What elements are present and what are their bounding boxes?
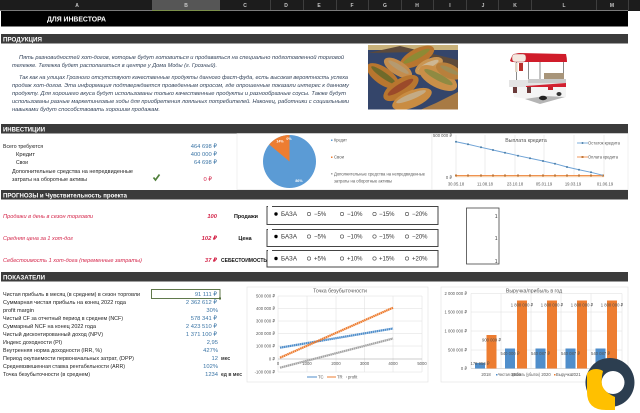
forecast inputs <box>3 214 267 264</box>
section heading: forecasts and sensitivity <box>1 190 628 200</box>
line chart: loan repayment: 11.08.18 <box>477 182 494 186</box>
selector: sales scenario: −20% <box>412 212 428 218</box>
indicators table: Средневзвешенная ставка рентабельности (ARR) <box>3 364 125 370</box>
product description text: продукту. Для хорошего вкуса будут использованы только качественные продукты и разнообразные соусы. Также будут <box>12 91 346 97</box>
investment table: 464 698 ₽ <box>191 144 217 150</box>
forecast inputs: 37 ₽ <box>205 258 218 264</box>
selector: sales scenario: −15% <box>379 212 395 218</box>
investment table: затраты на оборотные активы <box>12 177 87 183</box>
spreadsheet column header: G <box>383 3 387 9</box>
line chart: break-even point: 2000 <box>331 361 341 366</box>
line chart: loan repayment <box>432 133 628 190</box>
pie chart: funding sources: Кредит <box>334 138 347 142</box>
forecast inputs: Продажи <box>234 214 258 220</box>
forecast inputs: Продажи в день в сезон торговли <box>3 214 94 220</box>
indicators table: Индекс доходности (PI) <box>3 340 62 346</box>
bar chart: revenue and profit per year: 2 000 000 ₽ <box>445 291 467 296</box>
spreadsheet column header: M <box>610 3 614 9</box>
indicators table: Суммарная чистая прибыль на конец 2022 года <box>3 300 127 306</box>
bar chart: revenue and profit per year: 540 087 ₽ <box>531 351 550 356</box>
bar chart: revenue and profit per year: 1 000 000 ₽ <box>445 328 467 334</box>
pie chart: funding sources: 0% <box>286 137 292 141</box>
selector: sales scenario: −5% <box>314 212 327 218</box>
product description text: использованы разные маркетинговые ходы для приобретения лояльных потребителей. Наконец, работники с социальными <box>12 98 350 105</box>
selector: cost scenario: БАЗА <box>281 257 297 263</box>
section heading: products <box>1 34 628 44</box>
indicators table <box>3 290 242 378</box>
line chart: break-even point: 100 000 ₽ <box>256 344 275 348</box>
spreadsheet column header: E <box>317 3 321 9</box>
bar chart: revenue and profit per year: 2022 <box>601 372 611 377</box>
bar chart: revenue and profit per year: 1 800 000 ₽ <box>511 302 534 308</box>
line chart: loan repayment: 23.10.18 <box>507 182 524 186</box>
selector: price scenario <box>267 230 438 246</box>
indicators table: 2,95 <box>207 340 218 346</box>
indicators table: Чистый дисконтированный доход (NPV) <box>3 331 103 338</box>
indicators table: мес <box>221 356 230 362</box>
line chart: loan repayment: 500 000 ₽ <box>433 133 452 138</box>
investment table: 0 ₽ <box>203 177 212 183</box>
indicators table: Суммарный NCF на конец 2022 года <box>3 323 97 330</box>
investment table: 400 000 ₽ <box>191 152 217 158</box>
indicators table: 91 111 ₽ <box>195 292 217 298</box>
product description text <box>12 54 350 113</box>
section heading: products: ПРОДУКЦИЯ <box>3 36 42 43</box>
line chart: break-even point: 500 000 ₽ <box>256 294 275 298</box>
bar chart: revenue and profit per year: 2018 <box>481 372 491 377</box>
forecast inputs: СЕБЕСТОИМОСТЬ <box>221 258 267 264</box>
forecast inputs: Цена <box>238 236 253 242</box>
investment table: 64 698 ₽ <box>194 160 217 166</box>
bar chart: revenue and profit per year: Выручка <box>556 372 573 377</box>
product description text: продаж хот-догов. Эта информация подтверждается проведенным опросом, где опрошенные показали интерес к данному <box>12 83 350 89</box>
selector: price scenario: БАЗА <box>281 235 297 241</box>
selector: price scenario: −10% <box>347 235 363 241</box>
bar chart: revenue and profit per year <box>441 287 628 382</box>
spreadsheet column header: J <box>482 3 485 9</box>
indicators table: profit margin <box>3 308 34 314</box>
selector: price scenario: −20% <box>412 235 428 241</box>
selector: price scenario: −5% <box>314 235 327 241</box>
line chart: break-even point: -100 000 ₽ <box>255 370 275 374</box>
investment table: Дополнительные средства на непредвиденные <box>12 169 133 175</box>
bar chart: revenue and profit per year: Чистая прибыль (убыток) <box>498 372 541 377</box>
bar chart: revenue and profit per year: 540 087 ₽ <box>591 351 610 356</box>
icon: green check mark <box>154 174 160 180</box>
product description text: Пять разновидностей хот-догов, которые будут готовиться и продаваться на специально подготовленной торговой <box>19 54 345 61</box>
investment table: Свои <box>16 160 28 166</box>
indicators table: Внутренняя норма доходности (IRR, %) <box>3 348 102 354</box>
line chart: loan repayment: 01.06.19 <box>597 182 614 186</box>
spreadsheet column header <box>0 0 640 11</box>
indicators table: 12 <box>212 356 218 362</box>
pie chart: funding sources: Свои <box>334 154 345 160</box>
line chart: break-even point: 200 000 ₽ <box>256 331 275 336</box>
bar chart: revenue and profit per year: 540 000 ₽ <box>501 351 520 356</box>
line chart: loan repayment: 19.03.19 <box>565 182 582 186</box>
bar chart: revenue and profit per year: 540 087 ₽ <box>561 351 580 356</box>
indicators table: 1234 <box>205 372 219 378</box>
selector: cost scenario: +15% <box>379 257 395 263</box>
indicators table: 102% <box>203 364 218 370</box>
selector: cost scenario: +5% <box>314 257 327 263</box>
pie chart: funding sources: Дополнительные средства на непредвиденные <box>334 172 426 176</box>
investment table: Кредит <box>16 152 35 158</box>
line chart: loan repayment: 0 ₽ <box>446 175 452 180</box>
line chart: loan repayment: Выплата кредита <box>505 138 547 144</box>
pie chart: funding sources <box>237 134 432 190</box>
indicators table: 578 341 ₽ <box>191 316 217 322</box>
bar chart: revenue and profit per year: 900 000 ₽ <box>482 338 501 342</box>
indicators table: Точка безубыточности (в среднем) <box>3 372 90 378</box>
indicators table: Чистая прибыль в месяц (в среднем) в сезон торговли <box>3 292 140 298</box>
selector: cost scenario: +10% <box>347 257 363 263</box>
spreadsheet column header: K <box>513 3 517 9</box>
selector: sales scenario: БАЗА <box>281 212 297 218</box>
title banner <box>1 11 628 26</box>
bar chart: revenue and profit per year: 500 000 ₽ <box>448 348 467 352</box>
section heading: investments: ИНВЕСТИЦИИ <box>3 126 45 133</box>
selected values box <box>466 208 499 265</box>
spreadsheet column header: F <box>350 3 354 9</box>
picture: hot dogs <box>368 45 458 110</box>
line chart: break-even point: 1000 <box>302 361 312 366</box>
line chart: break-even point: 4000 <box>388 361 398 366</box>
product description text: тележке. Тележка будет располагаться в центре у Дома Моды (г. Грозный). <box>12 62 217 69</box>
bar chart: revenue and profit per year: 2021 <box>571 372 581 377</box>
line chart: break-even point: TR <box>337 374 343 380</box>
bar chart: revenue and profit per year: 178 956 ₽ <box>471 361 490 366</box>
bar chart: revenue and profit per year: 2019 <box>511 372 521 377</box>
selector: price scenario: −15% <box>379 235 395 241</box>
selected values box: 1 <box>495 214 498 220</box>
section heading: indicators: ПОКАЗАТЕЛИ <box>3 274 45 281</box>
line chart: loan repayment: 30.05.18 <box>448 182 465 186</box>
section heading: investments <box>1 124 628 134</box>
line chart: break-even point: TC <box>318 374 324 380</box>
bar chart: revenue and profit per year: 1 800 000 ₽ <box>601 302 624 308</box>
line chart: break-even point: Точка безубыточности <box>313 288 367 294</box>
line chart: loan repayment: 05.01.19 <box>536 182 553 186</box>
bar chart: revenue and profit per year: 1 500 000 ₽ <box>445 310 467 314</box>
icon: logo watermark <box>585 358 634 410</box>
spreadsheet column header: I <box>449 3 451 9</box>
line chart: break-even point: 5000 <box>417 361 427 366</box>
forecast inputs: Себестоимость 1 хот-дога (переменные затраты) <box>3 258 142 264</box>
indicators table: 427% <box>203 348 218 354</box>
product description text: Так как на улицах Грозного отсутствуют качественные продукты данного фаст-фуда, есть высокая вероятность успеха <box>19 75 349 81</box>
indicators table: Период окупаемости первоначальных затрат, (DPP) <box>3 356 134 362</box>
forecast inputs: 102 ₽ <box>202 236 218 242</box>
product description text: навыками будут способствовать хорошим продажам. <box>12 107 160 113</box>
line chart: break-even point <box>247 287 428 382</box>
indicators table: ед в мес <box>221 372 242 378</box>
spreadsheet column header: H <box>415 3 419 9</box>
investment table: Всего требуются <box>3 144 43 150</box>
selector: cost scenario <box>267 250 438 267</box>
spreadsheet column header: B <box>184 3 188 9</box>
title banner: ДЛЯ ИНВЕСТОРА <box>47 16 106 24</box>
pie chart: funding sources: 86% <box>295 179 303 183</box>
indicators table: 2 362 612 ₽ <box>186 300 217 306</box>
forecast inputs: Средняя цена за 1 хот-дог <box>3 236 73 242</box>
line chart: break-even point: 0 ₽ <box>269 356 275 362</box>
selector: sales scenario: −10% <box>347 212 363 218</box>
investment table <box>3 144 217 183</box>
bar chart: revenue and profit per year: 0 ₽ <box>461 366 467 371</box>
selector: cost scenario: +20% <box>412 257 428 263</box>
section heading: forecasts and sensitivity: ПРОГНОЗЫ и Чувствительность проекта <box>3 192 127 199</box>
forecast inputs: 100 <box>207 214 218 220</box>
spreadsheet column header: C <box>243 3 247 9</box>
pie chart: funding sources: 14% <box>276 140 284 144</box>
line chart: break-even point: profit <box>348 374 358 380</box>
spreadsheet column header: L <box>562 3 566 9</box>
line chart: loan repayment: Оплата кредита <box>588 154 619 160</box>
spreadsheet column header: D <box>284 3 288 9</box>
line chart: break-even point: 3000 <box>360 361 370 366</box>
selected values box: 1 <box>495 236 498 242</box>
line chart: break-even point: 300 000 ₽ <box>256 318 275 324</box>
bar chart: revenue and profit per year: 1 800 000 ₽ <box>541 302 564 308</box>
pie chart: funding sources: затраты на оборотные активы <box>334 178 392 184</box>
bar chart: revenue and profit per year: 2020 <box>541 372 551 377</box>
bar chart: revenue and profit per year: Выручка/прибыль в год <box>506 288 562 294</box>
selector: sales scenario <box>267 206 438 224</box>
indicators table: 1 371 100 ₽ <box>186 332 217 338</box>
line chart: loan repayment: Остаток кредита <box>588 140 621 146</box>
bar chart: revenue and profit per year: 1 800 000 ₽ <box>571 302 594 308</box>
picture: hot dog cart <box>509 53 567 104</box>
indicators table: Чистый CF за отчетный период в среднем (NCF) <box>3 315 123 322</box>
section heading: indicators <box>1 272 628 282</box>
line chart: break-even point: 0 <box>277 361 280 366</box>
indicators table: 2 423 510 ₽ <box>186 324 217 330</box>
selected values box: 1 <box>495 259 498 265</box>
line chart: break-even point: 400 000 ₽ <box>256 306 275 311</box>
indicators table: 30% <box>206 308 218 314</box>
spreadsheet column header: A <box>75 3 79 9</box>
